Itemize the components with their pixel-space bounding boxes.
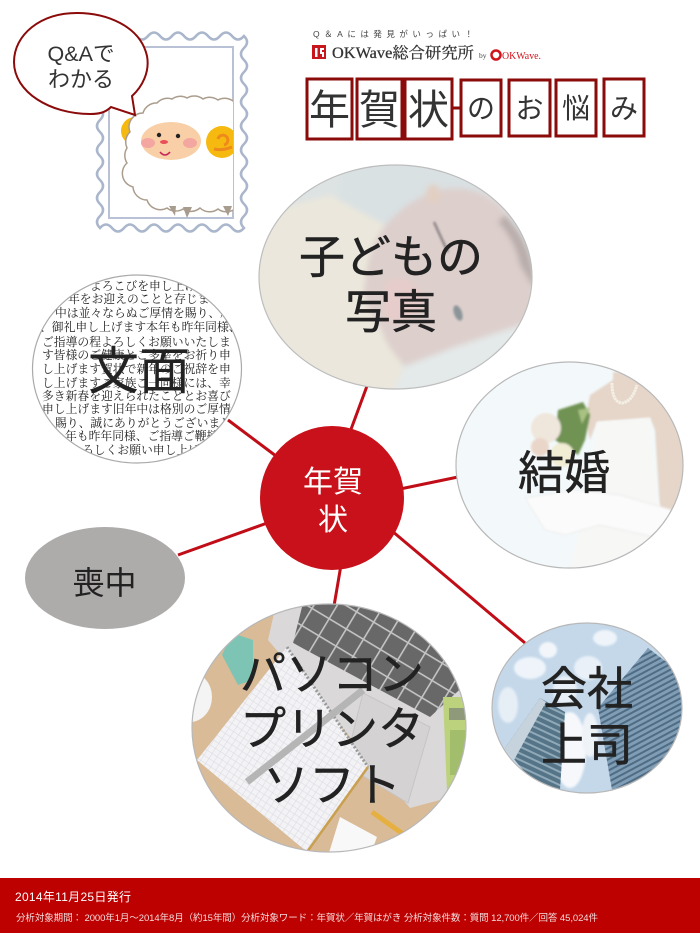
callout: Q&A speech bubble [14,13,148,115]
panel: 文面: 賜り、誠にありがとうございまし [55,416,232,430]
tagline: Q＆Aには発見がいっぱい！ [313,29,473,39]
panel: 結婚 [450,355,690,575]
panel: 文面: 、御礼申し上げます本年も昨年同様、 [40,320,241,334]
panel: center 年賀状 hub: 状 [318,504,348,537]
title: 年賀状のお悩み: 賀 [359,87,400,133]
panel: center 年賀状 hub: 年賀 [303,466,363,499]
logo: OKWave総合研究所 [312,44,541,62]
panel: 文面: ろしくお願い申し上げます [82,443,224,457]
panel: 文面: 中は並々ならぬご厚情を賜り、厚 [55,306,232,320]
panel: パソコン プリンタ ソフト: パソコン [240,648,424,700]
panel: 文面: 多き新春を迎えられたこととお喜び [42,389,231,403]
panel: 会社上司: 会社 [541,663,633,715]
panel: 子どもの写真 [255,160,540,395]
logo: OKWave総合研究所: OKWave. [502,51,541,62]
callout: Q&A speech bubble: Q&Aで [48,42,114,66]
footer band [0,878,700,933]
panel: 文面: 年をお迎えのことと存じます [68,292,222,306]
panel: パソコン プリンタ ソフト: ソフト [263,759,401,811]
footer band: 分析対象期間： 2000年1月～2014年8月（約15年間）分析対象ワード：年賀状／年賀はがき 分析対象件数：質問 12,700件／回答 45,024件 [16,912,598,924]
panel: 文面: 申し上げます旧年中は格別のご厚情 [42,402,231,416]
panel: 文面: し上げますご家族ご一同様には、幸 [42,376,231,390]
panel: パソコン プリンタ ソフト [191,603,467,853]
title: 年賀状のお悩み [307,79,644,139]
panel: 喪中 [25,527,185,629]
sheep illustration [121,96,238,218]
title: 年賀状のお悩み: 年 [309,87,350,133]
title: 年賀状のお悩み: み [610,93,638,124]
panel: 子どもの写真: 写真 [345,286,437,338]
footer band: 2014年11月25日発行 [15,890,131,904]
panel: 文面: 年も昨年同様、ご指導ご鞭撻 [65,429,219,443]
panel: 文面: 文面 [88,343,190,400]
panel: 文面: ご指導の程よろしくお願いいたしま [42,335,231,349]
panel: 文面: す皆様のご健康とご多幸をお祈り申 [42,348,231,362]
title: 年賀状のお悩み: 悩 [562,93,590,124]
panel: パソコン プリンタ ソフト: プリンタ [240,703,424,755]
title: 年賀状のお悩み: お [515,93,544,124]
panel: 結婚: 結婚 [518,447,610,499]
panel: 文面: し上げます賀状で新年のご祝辞を申 [42,362,231,376]
title: 年賀状のお悩み: 状 [408,87,449,133]
panel: 文面 [32,275,242,463]
logo: OKWave総合研究所: OKWave総合研究所 [332,44,475,62]
panel: 会社上司 [491,622,683,794]
panel: center 年賀状 hub [260,426,404,570]
panel: 子どもの写真: 子どもの [299,231,483,283]
icon: sheep postage stamp [97,32,247,232]
title: 年賀状のお悩み: の [467,93,495,124]
panel: 喪中: 喪中 [72,565,137,601]
panel: 文面: よろこびを申し上げます [90,279,220,293]
connector lines [178,386,525,643]
logo: OKWave総合研究所: by [479,51,487,60]
panel: 会社上司: 上司 [541,719,633,771]
callout: Q&A speech bubble: わかる [48,67,114,92]
